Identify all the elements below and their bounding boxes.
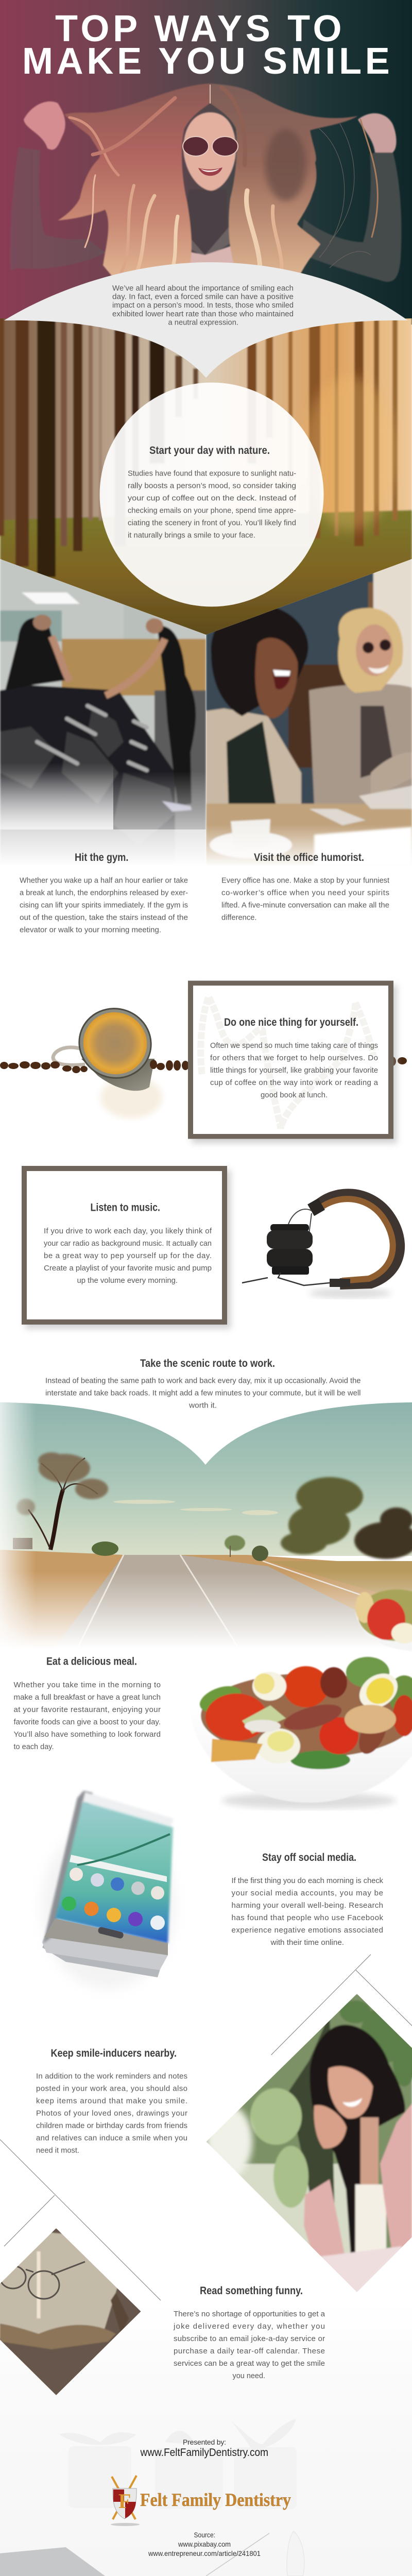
body text: interstate and take back roads. It might add a few minutes to your commute, but it will be well (45, 1388, 360, 1397)
panel: stay off social media (232, 1852, 383, 1947)
body text (36, 2072, 187, 2155)
smartphone stack (41, 1791, 175, 1989)
body text: up the volume every morning. (77, 1276, 178, 1285)
body text: co-worker’s office when you need your spirits (221, 889, 389, 897)
intro text: impact on a person’s mood. In tests, those who smiled (112, 301, 294, 310)
body text: If you drive to work each day, you likely think of (44, 1227, 212, 1235)
body text: you need. (233, 2371, 265, 2380)
body text: and relatives can induce a smile when you (36, 2134, 187, 2143)
logo: Felt Family Dentistry (111, 2476, 291, 2526)
body text (232, 1876, 383, 1947)
body text: with their time online. (270, 1938, 344, 1947)
gym photo (0, 559, 206, 868)
body text: Whether you take time in the morning to (13, 1681, 161, 1689)
panel: read something funny (173, 2285, 325, 2380)
logo: Felt Family Dentistry: F (118, 2489, 131, 2513)
body text: good book at lunch. (261, 1091, 328, 1099)
coffee mug with bean line (0, 998, 407, 1118)
body text: services can be a great way to get the smile (174, 2359, 325, 2368)
body text (20, 876, 188, 935)
heading: Take the scenic route to work. (140, 1358, 275, 1369)
title: TOP WAYS TO (55, 8, 345, 49)
body text: it naturally brings a smile to your face. (128, 531, 255, 540)
body text: checking emails on your phone, spend time appre- (128, 506, 296, 515)
body text: elevator or walk to your morning meeting. (20, 926, 161, 935)
panel: take the scenic route to work (45, 1358, 360, 1410)
body text: ciating the scenery in front of you. You’ll likely find (128, 519, 296, 528)
source block: Source: (194, 2531, 215, 2539)
logo: Felt Family Dentistry: Felt Family Dentistry (140, 2489, 291, 2510)
left trees (13, 1452, 118, 1556)
panel: eat a delicious meal (13, 1656, 161, 1751)
body text: Create a playlist of your favorite music and pump (44, 1264, 212, 1273)
body text: Photos of your loved ones, drawings your (36, 2109, 187, 2118)
body text: subscribe to an email joke-a-day service or (174, 2334, 325, 2343)
body text: There’s no shortage of opportunities to get a (174, 2310, 325, 2318)
body text: children made or birthday cards from friends (36, 2122, 187, 2130)
body text: has found that people who use Facebook (232, 1913, 383, 1922)
body text: harming your overall well-being. Research (232, 1901, 383, 1910)
forest photo panel (0, 314, 412, 639)
small bowl (355, 1589, 412, 1651)
heading: Hit the gym. (75, 852, 129, 863)
body text (13, 1681, 161, 1751)
body text: cising can lift your spirits immediately. If the gym is (20, 901, 188, 910)
body text (128, 469, 297, 540)
body text: You’ll also have something to look forward (13, 1730, 161, 1739)
body text: favorite foods can give a boost to your day. (13, 1718, 161, 1726)
salad bowls (189, 1589, 412, 1809)
title (22, 8, 393, 82)
body text: In addition to the work reminders and notes (36, 2072, 187, 2081)
body text: If the first thing you do each morning is check (232, 1876, 383, 1885)
body text (221, 876, 390, 922)
body text: be a great way to pep yourself up for the day. (44, 1251, 212, 1260)
body text: joke delivered every day, whether you (173, 2322, 325, 2331)
body text: your car radio as background music. It actually can (44, 1239, 212, 1248)
photo: woman on the phone in diamond frame (206, 1955, 412, 2293)
heading: Keep smile-inducers nearby. (50, 2047, 177, 2059)
intro text: We’ve all heard about the importance of smiling each (112, 284, 294, 293)
body text: out of the question, take the stairs instead of the (20, 913, 188, 922)
intro text: day. In fact, even a forced smile can have a positive (112, 293, 294, 301)
heading: Read something funny. (200, 2285, 303, 2297)
panel: listen to music (22, 1166, 231, 1329)
body text (173, 2310, 325, 2380)
heading: Do one nice thing for yourself. (224, 1016, 358, 1028)
heading: Listen to music. (91, 1202, 160, 1214)
panel: start your day with nature (100, 382, 323, 607)
source block: www.entrepreneur.com/article/241801 (148, 2549, 261, 2557)
office photo (206, 559, 412, 868)
body text: Often we spend so much time taking care of things (210, 1041, 378, 1050)
panel: do one nice thing for yourself (188, 981, 397, 1143)
panel: keep smile-inducers nearby (36, 2047, 187, 2155)
heading: Stay off social media. (262, 1852, 356, 1863)
body text: Every office has one. Make a stop by your funniest (221, 876, 390, 885)
icon: headphones (242, 1194, 399, 1298)
body text: purchase a daily tear-off calendar. These (174, 2347, 325, 2355)
road photo (0, 1401, 412, 1659)
body text: your social media accounts, you may be (232, 1889, 383, 1897)
body text: keep items around that make you smile. (36, 2097, 187, 2106)
intro text: a neutral expression. (168, 318, 238, 327)
intro text: exhibited lower heart rate than those who maintained (112, 310, 294, 318)
body text: a break at lunch, the endorphins released by exer- (20, 889, 188, 897)
body text: to each day. (13, 1742, 54, 1751)
heading: Start your day with nature. (149, 445, 270, 456)
source block: www.pixabay.com (178, 2540, 231, 2548)
title: MAKE YOU SMILE (22, 41, 393, 82)
body text: make a full breakfast or have a great lunch (13, 1693, 161, 1702)
right trees (225, 1477, 412, 1561)
body text: little things for yourself, like grabbing your favorite (210, 1066, 378, 1075)
panel: visit the office humorist (221, 852, 390, 922)
body text: Whether you wake up a half an hour earlier or take (20, 876, 188, 885)
photo: open book with glasses in diamond frame (0, 2140, 161, 2396)
hero panel (0, 0, 412, 325)
body text (210, 1041, 379, 1099)
panel: hit the gym (20, 852, 188, 935)
intro text (112, 284, 294, 327)
body text: rally boosts a person’s mood, so consider taking (128, 482, 296, 490)
footer background: faded desk scene (0, 2303, 412, 2576)
body text: lifted. A five-minute conversation can make all the (221, 901, 389, 910)
heading: Eat a delicious meal. (46, 1656, 137, 1668)
body text: difference. (221, 913, 256, 922)
body text: your cup of coffee out on the deck. Instead of (128, 494, 297, 503)
body text: for others that we forget to help ourselves. Do (210, 1054, 378, 1062)
presented by block: www.FeltFamilyDentistry.com (140, 2447, 268, 2459)
heading: Visit the office humorist. (254, 852, 364, 863)
hero photo: woman holding her hair (10, 83, 401, 283)
presented by block (140, 2438, 268, 2459)
presented by block: Presented by: (183, 2438, 226, 2446)
source block (148, 2531, 261, 2557)
body text (44, 1227, 212, 1285)
large bowl (189, 1657, 412, 1809)
body text: cup of coffee on the way into work or reading a (210, 1078, 379, 1087)
body text: at your favorite restaurant, enjoying your (13, 1705, 161, 1714)
body text: experience negative emotions associated (232, 1926, 383, 1935)
body text: posted in your work area, you should also (36, 2084, 187, 2093)
body text: need it most. (36, 2146, 79, 2155)
body text: Instead of beating the same path to work and back every day, mix it up occasionally. Avoid the (45, 1376, 360, 1385)
body text: Studies have found that exposure to sunlight natu- (128, 469, 296, 478)
body text (45, 1376, 360, 1410)
body text: worth it. (188, 1401, 217, 1410)
intro heart-shaped panel (4, 262, 408, 378)
